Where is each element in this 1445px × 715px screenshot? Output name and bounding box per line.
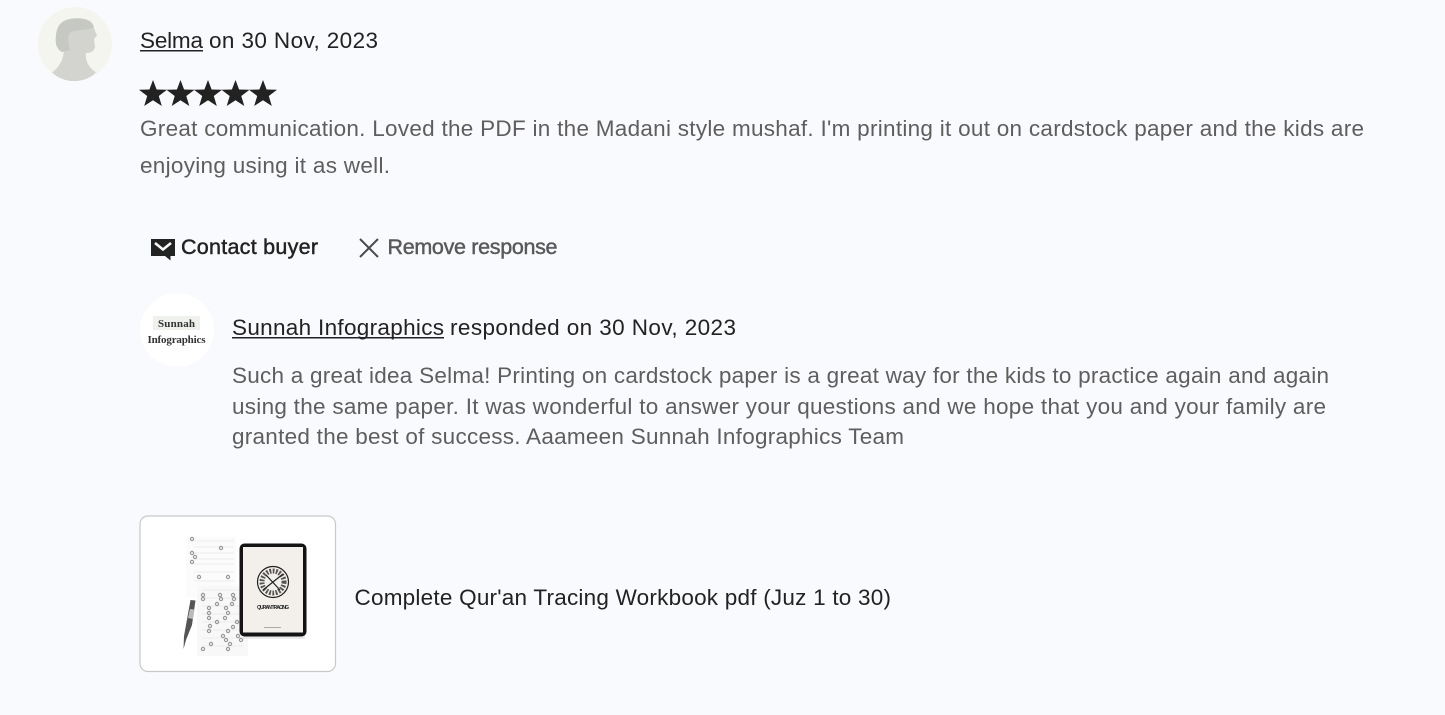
response text: Such a great idea Selma! Printing on cardstock paper is a great way for the kids to practice again and again	[232, 363, 1329, 388]
review text: Great communication. Loved the PDF in the Madani style mushaf. I'm printing it out on cardstock paper and the kids are	[140, 116, 1364, 141]
contact buyer button: Contact buyer	[181, 235, 318, 259]
buyer name and review date: Selma	[140, 28, 203, 53]
icon: message envelope	[151, 239, 175, 260]
icon: close cross	[360, 239, 378, 257]
workbook pages	[186, 537, 248, 656]
buyer avatar	[38, 7, 112, 81]
shop avatar: Infographics	[148, 334, 206, 346]
buyer name and review date: on 30 Nov, 2023	[209, 28, 378, 53]
shop name and response date: Sunnah Infographics	[232, 315, 444, 340]
review text: enjoying using it as well.	[140, 153, 390, 178]
product thumbnail	[140, 516, 336, 672]
shop name and response date	[232, 315, 736, 340]
five star rating	[139, 80, 277, 106]
response text: using the same paper. It was wonderful to answer your questions and we hope that you and your family are	[232, 394, 1326, 419]
tablet	[240, 544, 306, 639]
tablet emblem	[258, 566, 288, 598]
tablet: QURAN TRACING	[257, 605, 289, 611]
response text: granted the best of success. Aaameen Sunnah Infographics Team	[232, 424, 904, 449]
response text	[232, 363, 1329, 449]
review text	[140, 116, 1364, 178]
product title: Complete Qur'an Tracing Workbook pdf (Juz 1 to 30)	[354, 585, 891, 610]
pen	[184, 600, 196, 649]
shop avatar	[140, 293, 214, 367]
shop name and response date: responded on 30 Nov, 2023	[450, 315, 736, 340]
shop avatar: Sunnah	[158, 318, 195, 330]
remove response button: Remove response	[388, 235, 558, 259]
